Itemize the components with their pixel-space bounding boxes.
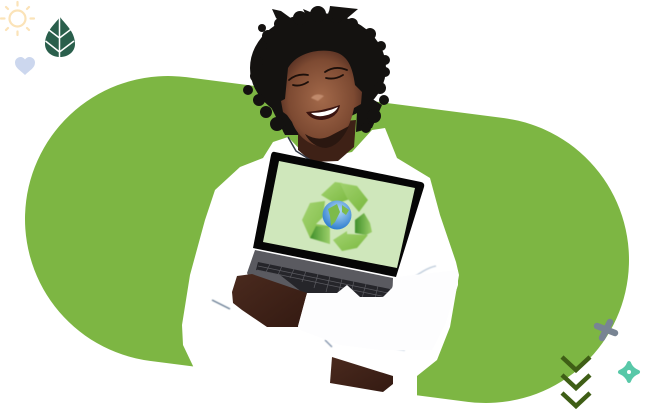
icon: teal sparkle [620,363,638,381]
icon: chevrons [562,357,590,406]
recycling symbol [302,182,372,251]
globe land [328,204,349,226]
neck [298,120,356,162]
green rounded background blob [168,219,486,260]
goatee [305,126,349,148]
icon: heart [15,57,35,75]
laptop screen [263,161,415,268]
hoodie [182,128,459,402]
hoodie shading [212,266,436,350]
icon: globe [322,200,352,230]
right sleeve [298,270,458,350]
keys [257,264,388,298]
hand [232,274,307,327]
mouth [306,105,340,120]
laptop base [247,250,393,305]
forearm [330,357,393,392]
face [281,51,362,147]
laptop [247,152,424,305]
eyebrows and eyes [289,68,347,86]
laptop lid bezel [253,152,424,277]
icon: sun [1,2,34,35]
nose highlight [311,94,324,101]
recycling arrows [302,182,372,251]
hair [243,6,390,135]
keyboard [256,262,390,302]
icon: leaf [45,17,75,58]
teeth [311,107,338,116]
person [182,6,459,402]
icon: cross [597,322,615,338]
hood inner edge [288,137,312,161]
